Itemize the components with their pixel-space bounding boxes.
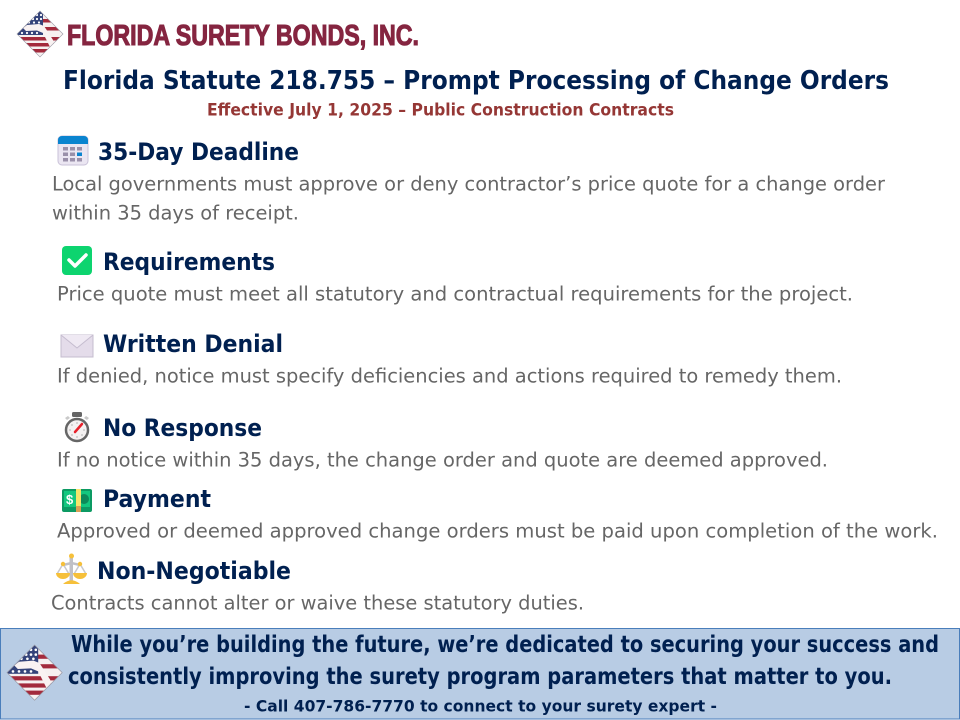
title: Florida Statute 218.755 – Prompt Processing of Change Orders xyxy=(63,66,889,96)
body text: If denied, notice must specify deficiencies and actions required to remedy them. xyxy=(57,364,842,388)
section: Non-Negotiable xyxy=(51,554,584,614)
heading: Requirements xyxy=(103,248,275,276)
body text: Price quote must meet all statutory and contractual requirements for the project. xyxy=(57,282,853,306)
icon: green check xyxy=(62,246,92,275)
icon: flag diamond logo xyxy=(7,645,62,700)
banner phone line: - Call 407-786-7770 to connect to your surety expert - xyxy=(244,696,717,716)
body text: If no notice within 35 days, the change order and quote are deemed approved. xyxy=(57,448,828,472)
section: 35-Day Deadline xyxy=(52,136,886,224)
icon: banknote xyxy=(62,489,92,512)
section: No Response xyxy=(57,412,828,472)
icon: banknote: $ xyxy=(66,492,74,507)
banner: call to action xyxy=(0,628,960,719)
heading: Non-Negotiable xyxy=(97,557,291,585)
heading: Written Denial xyxy=(103,330,283,358)
icon: envelope xyxy=(61,335,93,357)
subtitle: Effective July 1, 2025 – Public Construction Contracts xyxy=(207,100,674,120)
icon: balance scales xyxy=(56,554,87,584)
icon: calendar xyxy=(58,136,88,165)
logo: Florida Surety Bonds xyxy=(17,11,419,57)
body text: Local governments must approve or deny contractor’s price quote for a change order xyxy=(52,172,886,196)
section: Requirements xyxy=(57,246,853,306)
heading: Payment xyxy=(103,485,211,513)
body text line 2: within 35 days of receipt. xyxy=(52,202,299,224)
section: Payment xyxy=(57,485,938,542)
icon: flag diamond logo xyxy=(17,11,63,57)
heading: 35-Day Deadline xyxy=(98,138,299,166)
banner background xyxy=(0,628,960,719)
body text: Approved or deemed approved change orders must be paid upon completion of the work. xyxy=(57,520,938,542)
icon: stopwatch xyxy=(65,412,89,441)
heading: No Response xyxy=(103,414,262,442)
logo wordmark: FLORIDA SURETY BONDS, INC. xyxy=(67,20,419,52)
section: Written Denial xyxy=(57,330,842,388)
body text: Contracts cannot alter or waive these statutory duties. xyxy=(51,592,584,614)
